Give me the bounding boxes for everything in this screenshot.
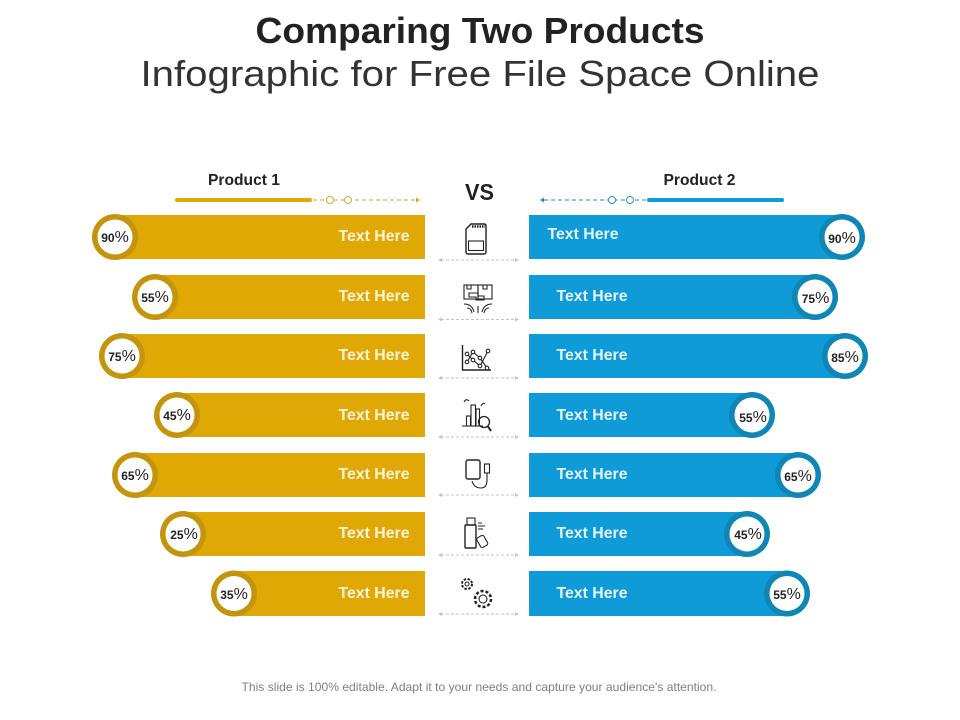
bar: product 2 row 3, 85%: 85% xyxy=(831,349,859,366)
icon: external hard drive xyxy=(466,460,490,488)
icon: gears xyxy=(462,579,491,607)
heading: Product 2 xyxy=(540,172,784,204)
bar: product 1 row 3, 75%: 75% xyxy=(108,348,136,365)
bar: product 1 row 4, 45% xyxy=(154,392,425,438)
bar: product 1 row 1, 90% xyxy=(92,214,425,260)
heading: Product 2: Product 2 xyxy=(664,172,736,189)
bar: product 1 row 6, 25%: 25% xyxy=(170,526,198,543)
bar: product 1 row 6, 25% xyxy=(160,511,425,557)
title: Comparing Two Products xyxy=(256,10,704,51)
bar: product 1 row 3, 75% xyxy=(99,333,425,379)
icon: line chart xyxy=(462,345,491,370)
bar: product 2 row 2, 75%: Text Here xyxy=(556,288,628,305)
bar: product 2 row 5, 65% xyxy=(529,452,821,498)
title: Infographic for Free File Space Online xyxy=(140,53,820,94)
icon: broken packages xyxy=(464,285,492,313)
icon: memory card xyxy=(466,224,486,254)
footer note: This slide is 100% editable. Adapt it to your needs and capture your audience's attention. xyxy=(242,680,716,694)
bar: product 2 row 3, 85%: Text Here xyxy=(556,347,628,364)
heading: VS: VS xyxy=(465,179,494,205)
bar: product 1 row 5, 65%: 65% xyxy=(121,467,149,484)
bar: product 2 row 7, 55%: Text Here xyxy=(556,585,628,602)
bar: product 2 row 4, 55%: Text Here xyxy=(556,407,628,424)
bar: product 1 row 2, 55% xyxy=(132,274,425,320)
bar: product 2 row 5, 65%: Text Here xyxy=(556,466,628,483)
bar: product 1 row 3, 75%: Text Here xyxy=(338,347,410,364)
bar: product 1 row 4, 45%: 45% xyxy=(163,407,191,424)
bar: product 1 row 7, 35% xyxy=(211,570,425,616)
heading: Product 1 xyxy=(175,172,420,204)
title xyxy=(140,10,820,94)
bar: product 1 row 6, 25%: Text Here xyxy=(338,525,410,542)
bar: product 1 row 7, 35%: 35% xyxy=(220,586,248,603)
bar: product 2 row 7, 55%: 55% xyxy=(773,586,801,603)
bar: product 1 row 7, 35%: Text Here xyxy=(338,585,410,602)
panel: product 1 bars xyxy=(92,214,425,616)
panel: product 2 bars xyxy=(529,214,868,616)
heading: Product 1: Product 1 xyxy=(208,172,280,189)
bar: product 1 row 5, 65%: Text Here xyxy=(338,466,410,483)
bar: product 1 row 2, 55%: 55% xyxy=(141,289,169,306)
bar: product 1 row 5, 65% xyxy=(112,452,425,498)
bar: product 2 row 6, 45% xyxy=(529,511,770,557)
bar: product 2 row 3, 85% xyxy=(529,333,868,379)
bar: product 2 row 6, 45%: Text Here xyxy=(556,525,628,542)
bar: product 2 row 7, 55% xyxy=(529,570,810,616)
bar: product 2 row 1, 90% xyxy=(529,214,865,260)
bar: product 2 row 1, 90%: Text Here xyxy=(548,226,619,243)
icon: bar chart with magnifier xyxy=(462,400,491,431)
bar: product 1 row 2, 55%: Text Here xyxy=(338,288,410,305)
bar: product 2 row 5, 65%: 65% xyxy=(784,468,812,485)
bar: product 2 row 4, 55% xyxy=(529,392,775,438)
dashed dividers between icons xyxy=(438,258,519,616)
bar: product 2 row 1, 90%: 90% xyxy=(828,230,856,247)
icon: usb drive xyxy=(465,518,488,548)
bar: product 1 row 4, 45%: Text Here xyxy=(338,407,410,424)
bar: product 2 row 4, 55%: 55% xyxy=(739,409,767,426)
bar: product 2 row 2, 75% xyxy=(529,274,838,320)
bar: product 1 row 1, 90%: 90% xyxy=(101,229,129,246)
bar: product 2 row 2, 75%: 75% xyxy=(802,290,829,307)
bar: product 1 row 1, 90%: Text Here xyxy=(338,228,410,245)
bar: product 2 row 6, 45%: 45% xyxy=(734,526,762,543)
